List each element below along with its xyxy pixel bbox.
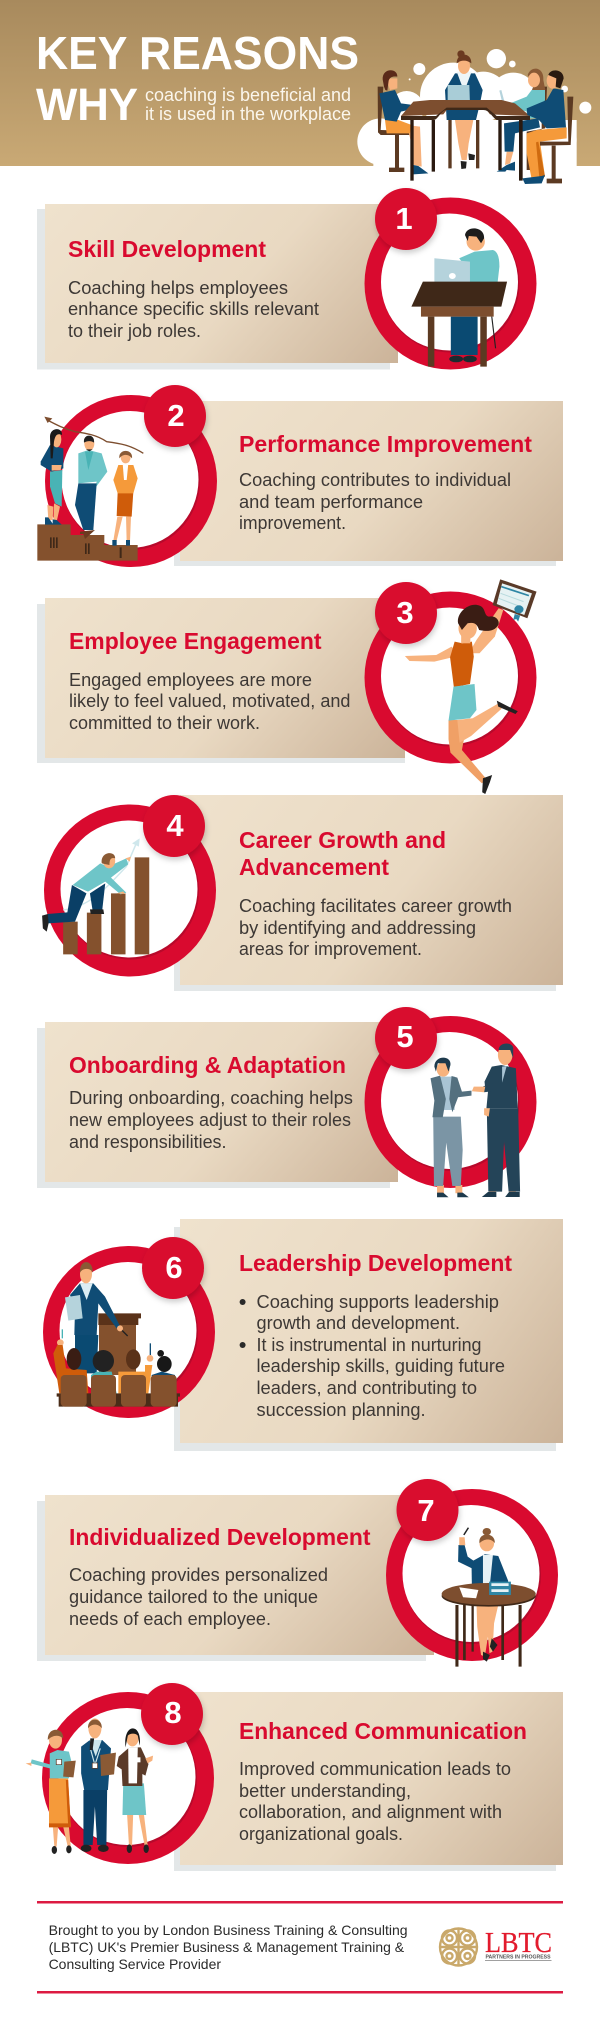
icon: woman seated at round table	[442, 1528, 536, 1667]
body text: enhance specific skills relevant	[68, 299, 319, 319]
heading: Enhanced Communication	[239, 1718, 527, 1744]
subtitle	[145, 85, 351, 124]
body text: and responsibilities.	[69, 1132, 226, 1152]
panel: onboarding and adaptation	[37, 1007, 536, 1197]
ring	[42, 1692, 214, 1864]
panel: career growth and advancement	[42, 795, 563, 991]
body text: likely to feel valued, motivated, and	[69, 691, 350, 711]
number badge	[142, 1237, 204, 1299]
logo wordmark: LBTC	[485, 1927, 552, 1959]
icon: man at desk with laptop	[411, 228, 507, 367]
panel: employee engagement	[37, 579, 537, 794]
icon: jumping woman holding certificate	[405, 579, 537, 794]
body text	[69, 1565, 328, 1629]
body text: Engaged employees are more	[69, 670, 312, 690]
body text: areas for improvement.	[239, 939, 422, 959]
heading	[239, 827, 446, 880]
ring	[364, 592, 536, 764]
bullet list: It is instrumental in nurturing	[256, 1335, 482, 1355]
icon: three people on podium steps	[37, 417, 143, 561]
icon: speaker at podium with audience	[53, 1262, 180, 1407]
number badge	[375, 188, 437, 250]
number badge	[143, 795, 205, 857]
heading: Individualized Development	[69, 1524, 371, 1550]
footer credit text	[49, 1922, 408, 1972]
number: 4	[166, 808, 184, 843]
number: 5	[396, 1019, 414, 1054]
bullet list: Coaching supports leadership	[256, 1292, 499, 1312]
bullet list	[240, 1292, 505, 1420]
ring	[44, 804, 216, 976]
heading: Advancement	[239, 854, 389, 880]
body text: and team performance	[239, 492, 423, 512]
number: 1	[395, 201, 413, 236]
body text: better understanding,	[239, 1781, 411, 1801]
panel: individualized development	[37, 1479, 558, 1667]
ring	[364, 198, 536, 370]
number badge	[141, 1683, 203, 1745]
panel: skill development	[37, 188, 536, 370]
body text	[69, 670, 350, 733]
logo wordmark: PARTNERS IN PROGRESS	[486, 1954, 551, 1960]
subtitle: coaching is beneficial and	[145, 85, 351, 105]
ring	[43, 1246, 215, 1418]
icon: man climbing bar chart	[42, 838, 149, 954]
panel: enhanced communication	[26, 1683, 563, 1871]
body text: new employees adjust to their roles	[69, 1110, 351, 1130]
bullet list: growth and development.	[256, 1313, 460, 1333]
number badge	[375, 1007, 437, 1069]
panel: performance improvement	[37, 385, 563, 567]
heading: Career Growth and	[239, 827, 446, 853]
body text: guidance tailored to the unique	[69, 1587, 318, 1607]
title: key reasons: KEY REASONS	[36, 27, 359, 79]
heading: Employee Engagement	[69, 628, 322, 654]
body text: improvement.	[239, 513, 346, 533]
number badge	[375, 582, 437, 644]
panel: leadership development	[43, 1219, 563, 1451]
body text	[239, 896, 512, 959]
title: why: WHY	[36, 79, 138, 130]
number: 6	[165, 1250, 183, 1285]
heading: Skill Development	[68, 236, 266, 262]
number: 7	[417, 1493, 435, 1528]
body text	[68, 278, 319, 341]
body text: Improved communication leads to	[239, 1759, 511, 1779]
number: 8	[164, 1695, 182, 1730]
ring	[386, 1489, 558, 1661]
body text: organizational goals.	[239, 1824, 403, 1844]
body text: During onboarding, coaching helps	[69, 1088, 353, 1108]
body text: collaboration, and alignment with	[239, 1802, 502, 1822]
bullet list: succession planning.	[256, 1400, 426, 1420]
body text: to their job roles.	[68, 321, 201, 341]
footer credit text: (LBTC) UK's Premier Business & Management Training &	[49, 1939, 405, 1955]
ring	[45, 395, 217, 567]
body text: Coaching facilitates career growth	[239, 896, 512, 916]
number: 2	[167, 398, 185, 433]
number badge	[396, 1479, 458, 1541]
footer credit text: Brought to you by London Business Training & Consulting	[49, 1922, 408, 1938]
icon: three colleagues with clipboards	[26, 1718, 153, 1854]
illustration: team meeting around a table	[357, 49, 591, 184]
bullet list: leaders, and contributing to	[256, 1378, 477, 1398]
body text: Coaching provides personalized	[69, 1565, 328, 1585]
body text	[239, 470, 511, 533]
icon: woman and man shaking hands	[431, 1043, 520, 1197]
footer	[37, 1901, 563, 1994]
ring	[364, 1016, 536, 1188]
header banner	[0, 0, 600, 166]
heading: Onboarding & Adaptation	[69, 1052, 346, 1078]
body text	[239, 1759, 511, 1844]
body text: needs of each employee.	[69, 1609, 271, 1629]
logo emblem	[440, 1928, 478, 1966]
footer credit text: Consulting Service Provider	[49, 1956, 221, 1972]
body text: Coaching helps employees	[68, 278, 288, 298]
bullet list: leadership skills, guiding future	[256, 1356, 505, 1376]
body text: Coaching contributes to individual	[239, 470, 511, 490]
body text: committed to their work.	[69, 713, 260, 733]
subtitle: it is used in the workplace	[145, 104, 351, 124]
number badge	[144, 385, 206, 447]
body text: by identifying and addressing	[239, 918, 476, 938]
number: 3	[396, 595, 414, 630]
heading: Performance Improvement	[239, 431, 532, 457]
heading: Leadership Development	[239, 1250, 512, 1276]
body text	[69, 1088, 353, 1152]
